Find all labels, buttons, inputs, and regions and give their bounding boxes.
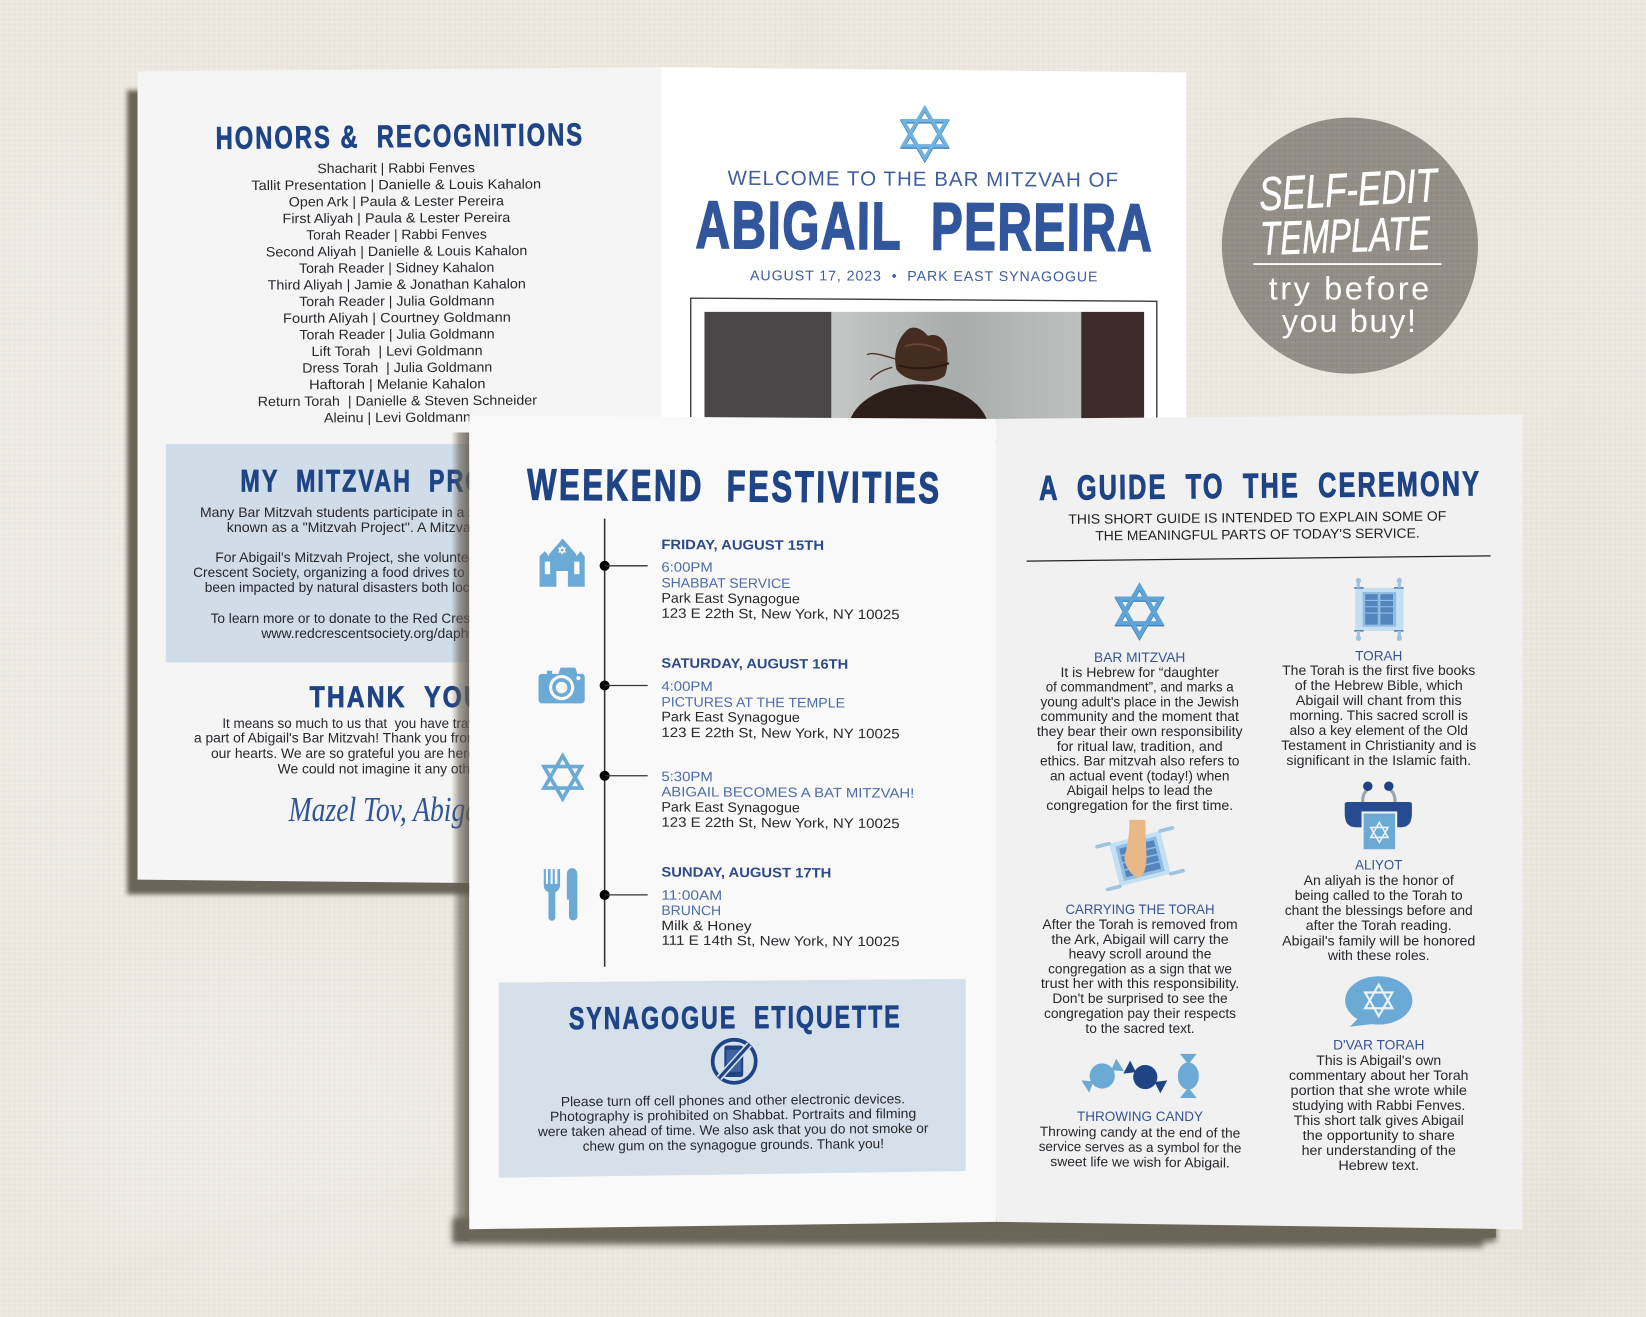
panel: my mitzvah project: MY MITZVAH PROJECT <box>240 462 553 498</box>
text block: honors list: Haftorah | Melanie Kahalon <box>309 376 485 392</box>
panel: my mitzvah project: To learn more or to donate to the Red Crescent <box>211 611 496 626</box>
section: torah: Abigail will chant from this <box>1296 693 1462 708</box>
entry: sunday: Milk & Honey <box>661 918 752 934</box>
section: torah: The Torah is the first five books <box>1282 663 1475 678</box>
icon: star <box>1118 586 1161 637</box>
icon: star of david <box>544 756 581 799</box>
text block: guide intro <box>1068 509 1446 544</box>
photo frame <box>691 298 1157 441</box>
section: d'var torah: Hebrew text. <box>1338 1158 1419 1173</box>
heading: weekend festivities: WEEKEND FESTIVITIES <box>527 460 942 513</box>
icon: camera <box>539 668 585 703</box>
text block: etiquette <box>537 1091 929 1154</box>
heading: thank you: THANK YOU <box>310 681 484 714</box>
text block: guide intro: THIS SHORT GUIDE IS INTENDED TO EXPLAIN SOME OF <box>1068 509 1446 527</box>
date and venue line: AUGUST 17, 2023 • PARK EAST SYNAGOGUE <box>750 268 1098 285</box>
entry: friday: FRIDAY, AUGUST 15TH <box>661 537 824 553</box>
back card shadow <box>127 90 473 894</box>
text block: honors list: Torah Reader | Julia Goldmann <box>299 293 495 309</box>
text block: honors list <box>251 160 542 426</box>
panel: my mitzvah project: For Abigail's Mitzvah Project, she volunteered <box>215 550 497 565</box>
text block: honors list: Aleinu | Levi Goldmann <box>324 410 471 425</box>
entry: saturday pictures <box>661 656 900 741</box>
heading: synagogue etiquette: SYNAGOGUE ETIQUETTE <box>569 998 902 1036</box>
entry: saturday ceremony: 123 E 22th St, New York, NY 10025 <box>661 815 900 831</box>
icon: synagogue <box>540 539 585 587</box>
section: torah: also a key element of the Old <box>1290 723 1468 738</box>
section: torah: morning. This sacred scroll is <box>1290 708 1468 723</box>
section: bar mitzvah: It is Hebrew for “daughter <box>1060 665 1219 680</box>
front card right page <box>996 415 1522 1229</box>
section: d'var torah: commentary about her Torah <box>1289 1068 1468 1083</box>
heading: honors and recognitions: HONORS & RECOGNITIONS <box>215 116 584 156</box>
section: throwing candy: Throwing candy at the end of the <box>1040 1124 1240 1141</box>
text block: honors list: Torah Reader | Rabbi Fenves <box>306 227 487 243</box>
entry: sunday <box>661 865 900 949</box>
section: bar mitzvah: of commandment”, and marks a <box>1046 680 1234 695</box>
section: bar mitzvah: Abigail helps to lead the <box>1067 783 1213 798</box>
icon: torah scroll <box>1354 578 1404 641</box>
entry: friday: Park East Synagogue <box>661 591 800 606</box>
photo: girl with hair bun <box>704 312 1144 423</box>
title: name: ABIGAIL PEREIRA <box>695 188 1154 266</box>
star of david icon: top <box>903 108 947 160</box>
welcome line: WELCOME TO THE BAR MITZVAH OF <box>727 167 1118 192</box>
timeline entries <box>661 537 914 949</box>
entry: saturday pictures: 4:00PM <box>661 679 713 694</box>
entry: friday: 6:00PM <box>661 560 713 575</box>
panel: my mitzvah project: known as a "Mitzvah Project". A Mitzvah <box>227 520 479 535</box>
text block: thank you message: We could not imagine it any other <box>278 762 483 777</box>
icon: hand holding torah <box>1097 820 1183 889</box>
entry: friday <box>661 537 900 622</box>
section: throwing candy <box>1039 1054 1241 1171</box>
section: aliyot: being called to the Torah to <box>1295 888 1463 903</box>
entry: saturday ceremony: ABIGAIL BECOMES A BAT MITZVAH! <box>661 784 914 801</box>
panel: my mitzvah project: www.redcrescentsociety.org/daphne <box>260 626 484 641</box>
panel: front card <box>469 415 1522 1229</box>
entry: saturday ceremony: 5:30PM <box>661 769 713 784</box>
back card left page <box>138 67 661 885</box>
section: carrying the torah: Don't be surprised to see the <box>1052 991 1228 1006</box>
front card shadow <box>451 432 1496 1247</box>
section: torah: TORAH <box>1355 648 1402 663</box>
section: throwing candy: sweet life we wish for Abigail. <box>1050 1154 1230 1171</box>
section: d'var torah <box>1289 976 1468 1173</box>
section: bar mitzvah: ethics. Bar mitzvah also refers to <box>1040 754 1239 769</box>
section: carrying the torah: congregation as a sign that we <box>1048 962 1232 977</box>
section: aliyot: with these roles. <box>1327 948 1430 963</box>
section: carrying the torah: After the Torah is removed from <box>1042 917 1238 932</box>
text block: honors list: Open Ark | Paula & Lester Pereira <box>289 193 504 210</box>
panel: synagogue etiquette <box>499 979 966 1178</box>
section: d'var torah: D'VAR TORAH <box>1333 1038 1424 1053</box>
section: throwing candy: THROWING CANDY <box>1077 1109 1203 1124</box>
text block: honors list: Third Aliyah | Jamie & Jonathan Kahalon <box>268 276 526 293</box>
text block: thank you message: It means so much to us that you have traveled <box>222 716 501 731</box>
text block: etiquette: Photography is prohibited on Shabbat. Portraits and filming <box>550 1106 916 1124</box>
section: throwing candy: service serves as a symbol for the <box>1039 1139 1241 1156</box>
section: d'var torah: This is Abigail's own <box>1316 1053 1441 1068</box>
section: bar mitzvah: an actual event (today!) when <box>1050 768 1229 783</box>
entry: friday: SHABBAT SERVICE <box>661 575 790 591</box>
text block: thank you message <box>194 716 501 777</box>
section: aliyot <box>1282 782 1475 963</box>
icon: no phones <box>713 1040 756 1083</box>
icon: candies <box>1079 1054 1199 1098</box>
section: carrying the torah: the Ark, Abigail will carry the <box>1051 932 1229 947</box>
panel: back card <box>138 67 1186 885</box>
text block: honors list: Return Torah | Danielle & Steven Schneider <box>258 393 537 409</box>
section: d'var torah: studying with Rabbi Fenves. <box>1292 1098 1465 1113</box>
badge subtext: try before <box>1269 271 1429 307</box>
icon: bimah lectern <box>1345 782 1412 849</box>
icon: fork and knife <box>544 868 577 921</box>
entry: sunday: BRUNCH <box>661 903 721 918</box>
panel: my mitzvah project: Many Bar Mitzvah students participate in a service <box>200 505 513 520</box>
heading: guide to the ceremony: A GUIDE TO THE CEREMONY <box>1039 465 1481 508</box>
text block: honors list: Torah Reader | Julia Goldmann <box>299 326 495 342</box>
text block: etiquette: chew gum on the synagogue grounds. Thank you! <box>583 1136 884 1154</box>
text block: etiquette: were taken ahead of time. We also ask that you do not smoke or <box>537 1121 929 1139</box>
section: torah <box>1281 578 1477 768</box>
text block: honors list: First Aliyah | Paula & Lester Pereira <box>282 210 511 226</box>
section: bar mitzvah: community and the moment that <box>1041 709 1239 724</box>
section: bar mitzvah: congregation for the first time. <box>1046 798 1233 813</box>
text block: honors list: Torah Reader | Sidney Kahalon <box>299 260 494 276</box>
entry: sunday: 11:00AM <box>661 888 722 903</box>
text block: honors list: Dress Torah | Julia Goldmann <box>302 360 492 376</box>
back card right page <box>661 67 1186 441</box>
section: aliyot: Abigail's family will be honored <box>1282 933 1475 948</box>
entry: saturday ceremony: Park East Synagogue <box>661 799 800 815</box>
panel: my mitzvah project: been impacted by natural disasters both locally <box>205 580 490 595</box>
text block: honors list: Second Aliyah | Danielle & Louis Kahalon <box>266 243 527 260</box>
section: bar mitzvah <box>1037 586 1243 813</box>
section: bar mitzvah: young adult's place in the Jewish <box>1041 695 1239 710</box>
section: d'var torah: her understanding of the <box>1302 1143 1456 1158</box>
badge heading: SELF-EDIT <box>1258 159 1441 221</box>
text block: etiquette: Please turn off cell phones and other electronic devices. <box>561 1091 905 1109</box>
section: bar mitzvah: BAR MITZVAH <box>1094 650 1185 665</box>
section: carrying the torah: trust her with this responsibility. <box>1041 976 1239 991</box>
section: torah: Testament in Christianity and is <box>1281 738 1477 753</box>
entry: saturday pictures: PICTURES AT THE TEMPLE <box>661 694 845 711</box>
section: bar mitzvah: they bear their own responsibility <box>1037 724 1243 739</box>
entry: saturday ceremony <box>661 769 914 831</box>
section: carrying the torah: to the sacred text. <box>1085 1021 1195 1036</box>
section: torah: significant in the Islamic faith. <box>1286 753 1471 768</box>
icon: speech bubble with star <box>1345 976 1412 1027</box>
section: d'var torah: portion that she wrote while <box>1291 1083 1467 1098</box>
section: carrying the torah: congregation pay their respects <box>1044 1006 1236 1021</box>
text block: honors list: Fourth Aliyah | Courtney Goldmann <box>283 310 511 326</box>
badge: self-edit template: TEMPLATE <box>1259 207 1431 266</box>
badge: self-edit template: you buy! <box>1282 303 1416 339</box>
entry: sunday: SUNDAY, AUGUST 17TH <box>661 865 831 881</box>
section: aliyot: chant the blessings before and <box>1285 903 1473 918</box>
section: carrying the torah: CARRYING THE TORAH <box>1065 902 1215 917</box>
section: aliyot: after the Torah reading. <box>1306 918 1452 933</box>
entry: saturday pictures: 123 E 22th St, New York, NY 10025 <box>661 725 900 741</box>
text block: thank you message: a part of Abigail's Bar Mitzvah! Thank you from <box>194 731 478 746</box>
section: torah: of the Hebrew Bible, which <box>1295 678 1463 693</box>
entry: sunday: 111 E 14th St, New York, NY 10025 <box>661 933 900 949</box>
text block: thank you message: our hearts. We are so grateful you are here <box>211 746 476 761</box>
section: d'var torah: the opportunity to share <box>1303 1128 1455 1143</box>
text block: honors list: Lift Torah | Levi Goldmann <box>312 343 483 359</box>
signature: mazel tov: Mazel Tov, Abigail <box>288 791 494 829</box>
panel: my mitzvah project <box>166 444 553 662</box>
entry: saturday pictures: SATURDAY, AUGUST 16TH <box>661 656 848 672</box>
badge: self-edit template <box>1222 118 1478 374</box>
text block: honors list: Tallit Presentation | Danielle & Louis Kahalon <box>251 177 541 193</box>
timeline <box>600 519 648 967</box>
entry: friday: 123 E 22th St, New York, NY 10025 <box>661 606 900 622</box>
section: aliyot: An aliyah is the honor of <box>1304 873 1454 888</box>
section: carrying the torah <box>1041 820 1239 1036</box>
section: aliyot: ALIYOT <box>1355 858 1403 873</box>
text block: honors list: Shacharit | Rabbi Fenves <box>317 160 475 176</box>
entry: saturday pictures: Park East Synagogue <box>661 709 800 725</box>
text block: guide intro: THE MEANINGFUL PARTS OF TODAY'S SERVICE. <box>1095 526 1420 543</box>
front card left page <box>469 416 996 1229</box>
section: carrying the torah: heavy scroll around the <box>1069 947 1211 962</box>
section: d'var torah: This short talk gives Abigail <box>1294 1113 1464 1128</box>
section: bar mitzvah: for ritual law, tradition, and <box>1057 739 1223 754</box>
panel: my mitzvah project: Crescent Society, organizing a food drives to help <box>193 565 494 580</box>
